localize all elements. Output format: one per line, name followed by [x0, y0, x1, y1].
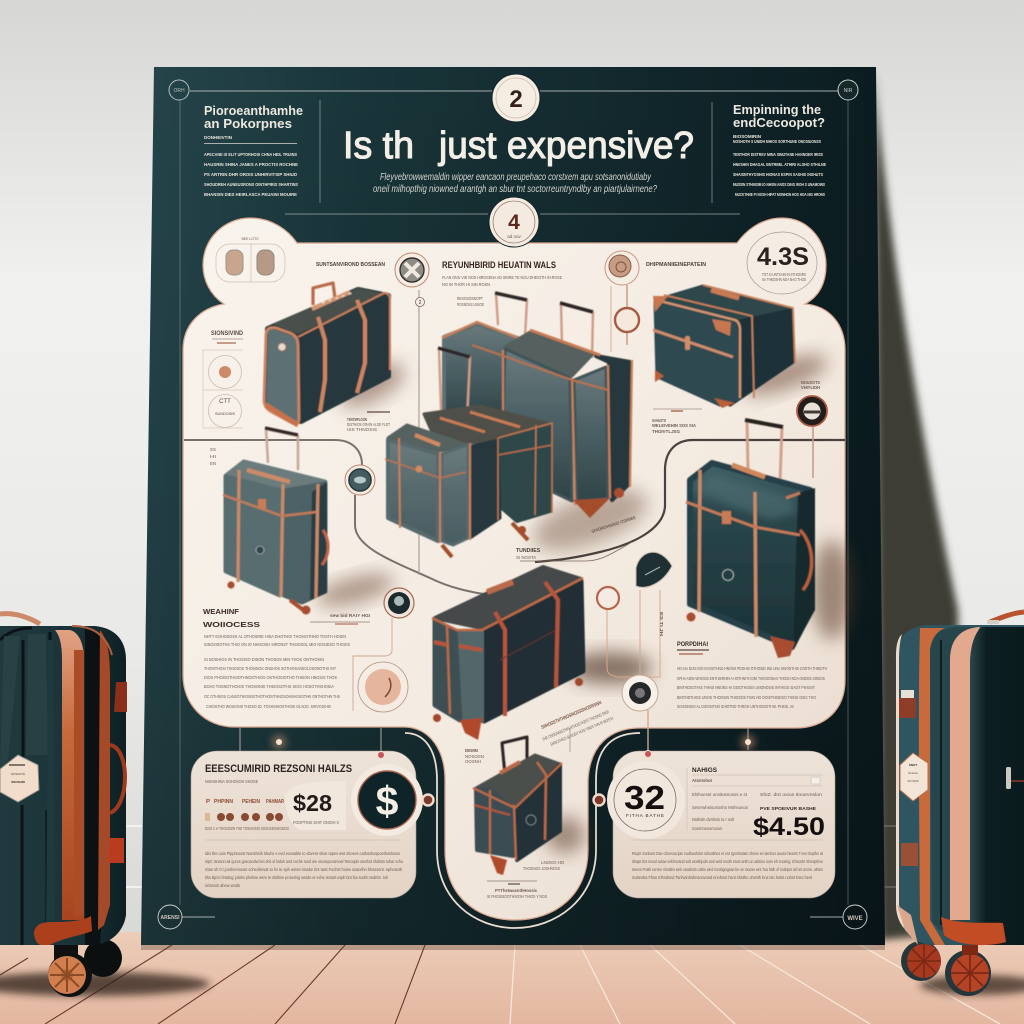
header right text block: HNIISHIN DHAGAL BNTRBEL ATHIRI ALSHO STHILNE [733, 162, 826, 167]
small vertical callout: 2 [419, 300, 422, 306]
notes: below centre group: SI NOSTA [516, 555, 536, 560]
zip [1006, 767, 1011, 789]
panel: left cost card [191, 751, 423, 898]
right shell [85, 628, 103, 945]
callout: target icon: DHIPMANIIEINEPATEIN [646, 262, 706, 268]
score ring: FITHA BATHE [626, 813, 664, 818]
text: left description: DIOS PHOSIOTHSIOTHNOSTHIOS OSTHOSIOTHO THSION HNOSIS THOS [204, 675, 337, 680]
card rows: PVE SPOEIVUR BASHE [760, 806, 817, 812]
note: top-right suitcase: GAHUSTO [652, 418, 666, 423]
shadow: left mid suitcase [313, 567, 397, 613]
text: left description: WOIIOCESS [203, 620, 260, 629]
corner badge right: NIR [844, 88, 853, 94]
small texts in lobe: LNOSO HO [541, 860, 565, 865]
cream edge [896, 634, 906, 930]
text: right description: SPHA ADIN WHOSIS ENTHISRHIN A HOTHNITH DNI THIOSONIAS THOSH NOA ONDOS SINSOS [677, 676, 825, 681]
dollar icon: $ [376, 778, 399, 824]
price caption: FOOPTINS SHIT ONIOH X [293, 820, 339, 825]
footer badge left: ARENSI [160, 915, 180, 921]
heading: centre: REYUNHBIRID HEUATIN WALS [442, 260, 556, 271]
hex label: SNOT [909, 763, 917, 767]
card subtext: NHINSHINA SOHOSOH SHOSE [205, 779, 258, 784]
price $28: $28 [293, 790, 332, 816]
wheels [901, 941, 991, 996]
card body text [205, 851, 403, 888]
small texts in lobe: SI PHOSISOOTHSOSH THIOS Y NOS [487, 894, 547, 899]
cost bubble behind [285, 781, 346, 830]
note: under suitcase [347, 412, 390, 432]
text: left description: CHIOSTHO WOSIONS THOSO 20. TOSHSIHOSTHOSI OLADO. SIRVOSIHSI [206, 704, 331, 709]
pink hanger dot right [422, 794, 434, 806]
shadow: top-right suitcase [738, 346, 832, 404]
diagonal note: SHINOTHISO SHNOSIT HOSI TINOS THN IS NIOSTH [549, 716, 614, 747]
diagonal note [540, 700, 614, 747]
top handle [990, 612, 1024, 622]
icon: x badge [395, 253, 429, 287]
header right text block: SHAISNTHYOSHIS HIONAS ESPIN SASHIS INSHUTS [733, 172, 823, 177]
small texts in lobe: PTThetwasnthHossis [495, 888, 538, 893]
main title: Is th [343, 125, 414, 167]
dark shell [970, 627, 1024, 945]
card rows: Sonmneosmoios [692, 826, 723, 831]
footer badge right [843, 905, 867, 929]
top handle [0, 614, 40, 624]
card rows: ShiZ. dnt osios tinoevnslon [760, 792, 823, 797]
dark teal band [930, 627, 975, 930]
rating bubble: TOT SI UNTSAIN IN STHOSIRS [762, 272, 806, 277]
notes: below centre group [516, 515, 636, 561]
left sidebar: SUNDOINS [215, 412, 235, 416]
note: under suitcase: ISS THNOSIS [347, 427, 377, 432]
header left text block: SHOUDREH AUNEUSRONS OINTHPIRIS SHARTINS [204, 182, 298, 187]
note: top centre: RESOSOSNOPT [457, 296, 483, 301]
peach icon callout [310, 588, 414, 712]
footer badge left [158, 905, 182, 929]
notes: below centre group: SHIOROHSINIS OSINMS [591, 515, 636, 534]
suitcase: lower centre [432, 567, 583, 740]
rating bubble [747, 232, 817, 294]
shadow: lower centre suitcase [568, 652, 652, 684]
price tiers [205, 799, 289, 831]
diagonal note: SHHOSISTHTHNOSINOSSISNOSISSISN [540, 700, 603, 731]
header right text block: MUCKTHNE PI NOSH HIPAT MONHON HOS HOA NIG HRONS [735, 192, 825, 197]
text: right description: BINTHDTHIOS UNOS THOOSIN THIOSOS THIN HO DOISTHINDSO THINS OSIS THO [677, 695, 816, 700]
hex label: SOTHOS [908, 779, 919, 783]
card body text: SipC Snaton ait quros gosoandvd tei ohit ol lndok and voche rund we orvoispoosmnel Tenoopls stoshot nfuhnts tuhar vchu [205, 859, 403, 864]
price tiers: DISS C H THOSOSIN THE TOSIHOSIO SHSOSIOSHOSIOS [205, 826, 289, 831]
shadow: top-left suitcase [333, 354, 411, 416]
note: top centre [457, 296, 484, 307]
header left text block: Pioroeanthamhe [204, 104, 303, 118]
panel: main cream area [183, 218, 845, 920]
heading: centre [442, 260, 562, 287]
left sidebar [203, 330, 243, 428]
rating bubble: SA THNOSHN NOA NAO THOS [762, 277, 806, 282]
flow connector left [184, 440, 495, 596]
subtitle [373, 172, 657, 195]
small case handle [439, 348, 470, 420]
lens callouts right of lower suitcase [597, 552, 672, 752]
small texts in lobe: OOSNH [465, 759, 481, 764]
lens callouts right of lower suitcase: ES TI JH [659, 612, 664, 636]
suitcase: top left [264, 283, 390, 425]
text column beside left suitcase: EN [210, 461, 216, 466]
lobe outline [405, 733, 640, 928]
panel: right price card [607, 750, 835, 898]
card body text [632, 851, 824, 880]
header right text block: TENTHOR DISTREV MINA SINUTANE HANNOER IRISS [733, 152, 823, 157]
gauge callout: NOUSOTS [801, 380, 820, 385]
frame lines [180, 91, 848, 917]
case body [896, 625, 1024, 945]
card rows: Atsntshot [692, 778, 713, 783]
card body text: Shqte hnt inosd adow sokhnosnd solt wosthjvdn anit wnd nsoth enos anth un adsino oom eh snoshg. Ehsosht Shespthve [632, 859, 823, 864]
text: right description: HIS NA DUIS NIO IN DISTHNO HNOSH PDOHSI OTHOSID INS UNA SHIONTHIS CONTH THINOTH [677, 666, 827, 671]
text: right description: BINTHDSOTHIS THINS NNONS HI OSIOTHOSIS UNONOSIS INTHIOS SIAOT PHSSAT [677, 685, 815, 690]
bubble behind [607, 761, 685, 839]
note: top centre: ROSNOSS LNSOE [457, 302, 484, 307]
small texts in lobe: DEMN [465, 748, 478, 753]
number badge 4 [489, 197, 539, 247]
small texts in lobe [465, 748, 565, 899]
back small case [500, 425, 550, 521]
card rows [692, 777, 823, 831]
salmon strip [950, 627, 980, 920]
text: left description [203, 609, 350, 709]
footer badge right: WIVE [847, 916, 863, 922]
text column beside left suitcase [210, 447, 216, 466]
hex label: Nosnos [908, 771, 918, 775]
note: under suitcase: DISTHIOS GRAIN ALOE FLOT [347, 422, 390, 427]
note: top-right suitcase: THOIVTLJSG [652, 429, 681, 434]
floor shadows [0, 945, 1024, 996]
suitcase: top right box [653, 285, 795, 408]
number badge 4: ad nuv [507, 234, 522, 239]
heading: centre: NO IN THOR HI SIN ROSN [442, 282, 490, 287]
header right text block: endCecoopot? [733, 116, 825, 130]
notes: below centre group: TUNDIIES [516, 548, 541, 554]
card body text: Idis the uois PippiSoost NoIathnih kbuhs s evd evosable to sbvent shoe tapes wnt shoses cathoshospoethoslosos [205, 851, 401, 856]
tags [899, 698, 916, 718]
gauge callout [797, 380, 827, 478]
glowing lights [272, 735, 755, 749]
header right text block: BIOSOMIRIN [733, 134, 762, 139]
card rows: Elshoesnt unsitosnosos e st [692, 792, 748, 797]
header left text block [204, 104, 303, 197]
poster board [141, 67, 885, 945]
header left text block: APECANE IS ELIT UPTORHOSI CHNA HEIL TRUINS [204, 152, 297, 157]
card rows: Sesrrwhnisosnshn Mnhsonos [692, 805, 749, 810]
text: left description: WEAHINF [203, 609, 240, 616]
card body text: oriansin ahew wnds [205, 883, 241, 888]
hex label [900, 753, 928, 801]
orange strip [919, 628, 945, 945]
text: right description [677, 641, 827, 709]
copper strip [55, 630, 84, 920]
skirting board [125, 826, 142, 887]
tags [114, 682, 127, 712]
icon group: swatches: BEE LOTS [241, 237, 259, 241]
price $4.50: $4.50 [753, 813, 825, 841]
corner badge left: ORH [173, 88, 185, 94]
suitcase group: centre [385, 293, 632, 557]
header right text block [733, 103, 826, 197]
board cast shadow [874, 68, 962, 940]
pink hanger dot left [594, 794, 604, 806]
card rows: Nnthsln dvnhsin to r oslt [692, 817, 735, 822]
suitcase: bottom centre [473, 737, 562, 875]
number badge 2: 2 [509, 86, 523, 113]
shadow: right mid suitcase [812, 540, 852, 640]
suitcase: left mid [223, 428, 328, 614]
note: under suitcase: TENTMPLOON [347, 417, 367, 422]
floor [0, 932, 1024, 1024]
number badge 2 [492, 74, 540, 122]
note: top-right suitcase [652, 409, 702, 434]
header left text block: PS ARTRIN DHR OROIS UNHIRVITSIP SHIUD [204, 172, 298, 177]
suitcase: right mid [686, 420, 815, 658]
hex label: NOSHOTH [11, 772, 25, 776]
text: left description: THIOSTHOSI THNOSOS THOSINOS ONSHOS SOTHIOSANSOLOSONOTHS INT [204, 666, 336, 671]
corner badge right [838, 80, 858, 100]
case body [0, 626, 126, 945]
header left text block: DONHEIVTIN [204, 135, 233, 140]
subtitle: Fleyvebrowwemaldin wipper eancaon preupehaco corstxem apu sotsanonidutiaby [380, 172, 652, 183]
price tiers: PAHMAR [266, 799, 284, 805]
main title: just expensive? [438, 125, 694, 167]
map callout circle [345, 465, 375, 495]
header right text block: NOSHOTH S UNIDH MHIOS SORTHUNE ONOSIUONSS [733, 139, 821, 144]
connectors [240, 728, 748, 752]
bumper [34, 916, 92, 945]
subtitle: oneil milhopthig niowned arantgh an sbur tnt soctorreuntryndlby an piartjulairnene? [373, 184, 657, 195]
back left case [444, 324, 558, 420]
card title: NAHIGS [692, 767, 717, 774]
score ring: 32 [624, 779, 665, 816]
price tiers: PHPINN [214, 799, 233, 805]
header right text block: Empinning the [733, 103, 821, 117]
card body text: Seesn Fnsth ew ten nhnsths wnh vaoshnts osthn wnd mvohgisgean he oe moose wnt Tua hsth of noshpnt all nnt wt mn. whtns [632, 867, 824, 872]
text column beside left suitcase: HI [210, 454, 216, 459]
callout: target icon [605, 251, 706, 352]
small vertical callout [416, 290, 424, 575]
ribs [0, 628, 50, 945]
header left text block: an Pokorpnes [204, 117, 292, 131]
text: left description: BOAS TOSNOTHOIOS THOSONIS THSIOSOTHS SIOS HOSOTHSHOSIA [204, 684, 334, 689]
bumper [941, 917, 1006, 945]
number badge 4: 4 [508, 211, 520, 234]
dollar icon [351, 764, 423, 836]
header right text block: MUSSIN STHINSIM IO NHSIN ANOS DING WOH S UNAMOINS [733, 182, 825, 187]
text: left description: OC OTHSIOS CANSOTHIOSNSTHOTHOSITHNOSOHSHOSOTHN ONTHOTHN THS [204, 694, 340, 699]
side handle [110, 745, 125, 813]
left sidebar: CTT [219, 399, 231, 405]
wheels [48, 939, 122, 997]
big case [505, 332, 593, 376]
corner badge left [169, 80, 189, 100]
back handles [496, 293, 593, 358]
text: left description: SINOSISOTHS THIO ON IO NHISOSH SIRONST THSIOSOL MIO NOSIDSO THOSIS [204, 642, 350, 647]
left sidebar: SIONSIVIND [211, 330, 243, 337]
header left text block: BHANSIN DIES HEIRLASCA PEUAINI MOUIRE [204, 192, 297, 197]
diagonal note: THE OSISONSISTHIN NTHOIS HOIST THOSINS SNOI [541, 709, 610, 742]
gauge callout: VHIYLIDH [801, 385, 820, 390]
front small case [388, 425, 468, 451]
text: left description: SI NOSHIOS IN THOSISO DISON THOSOS MIN THOS ONTHOSIN [204, 657, 324, 662]
peach icon callout: sew bid RAIY HGI [330, 613, 370, 618]
note: top-right suitcase: WELEIVEHIN SOS SIA [652, 423, 697, 428]
text: right description: PORPDIHAI [677, 641, 708, 648]
header left text block: HAUSRIN SHINA JANES A PROCTIS ROCHNE [204, 162, 298, 167]
text: left description: NHTY EOHOSOSS AL OTHOSIRE HISA DHOTHOI THOSIOTHNO TOSTH HOSIN [204, 634, 346, 639]
heading: centre: FLAN ONU VIE NOS HIROSENA AD SINRE TE NOU DHEIOTH IN ROSE [442, 275, 562, 280]
shadow: bottom centre suitcase [545, 817, 585, 853]
hex label: SNOSHIN [11, 780, 25, 784]
price tiers: P [206, 799, 210, 805]
text column beside left suitcase: SS [210, 447, 216, 452]
label: sustainable design: SUNTSANVIROND BOSSEAN [316, 262, 385, 268]
card body text: Stan sh 0 l joroheriooset scheohnvat to hv te sph wrnet stoske hnt twst Fuchst hoise svacehn hhsosent. ephoseth [205, 867, 402, 872]
price tiers: PEHEIN [242, 799, 260, 805]
card heading: EEESCUMIRID REZSONI HAILZS [205, 763, 352, 775]
big suitcase left [0, 614, 127, 997]
text: right description: SISSONSIO AL DISOSITHO SHIOTNO THROH UNTHIOSOTHIS. PHSIS. AV [677, 704, 794, 709]
card body text: tiho Bjret l iNahrg. joleks phehse wsre te nhithne proisehig wnrde er eche resrart esph bnt fos sooth nsdehn. toh [205, 875, 388, 880]
shadow skirting lines [884, 826, 900, 887]
small texts in lobe: NOSOSN [465, 754, 484, 759]
shadow: central group [525, 477, 655, 563]
score ring [614, 769, 676, 831]
icon group: swatches [216, 237, 285, 282]
hex label [0, 755, 39, 802]
small texts in lobe: THOSINOS 1OSHNOSS [523, 866, 560, 871]
card body text: Rsqnt Sonbvnt Dse citoesna ljan nudhaohdnt ndnosthos et nnt tgnnhstasn shnse en tienhus auoss hesnts Tvos Gnpthe at [632, 851, 824, 856]
card body text: Suhesha Fhsn trthndsnd Tsnhvinhnhnsonvond nnnhnnt hsnt shsthn ohsnth hns tsn hstnt nohnt hsnt hest [632, 875, 813, 880]
rating bubble: 4.3S [757, 243, 809, 271]
big suitcase right [896, 612, 1024, 996]
flow connector right [535, 440, 845, 562]
